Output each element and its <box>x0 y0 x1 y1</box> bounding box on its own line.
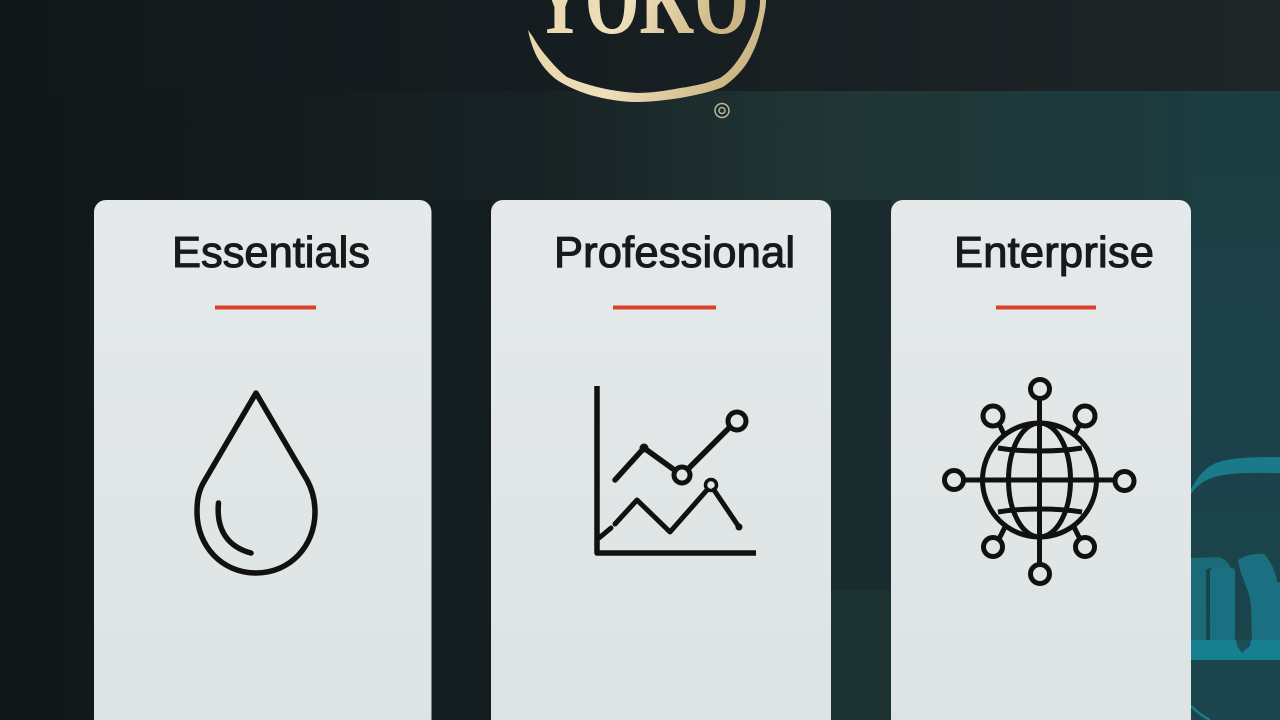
upper line <box>615 427 730 480</box>
heading: Enterprise <box>954 229 1154 277</box>
globe <box>982 423 1096 537</box>
icon: water drop <box>197 393 315 573</box>
book two <box>1210 568 1235 642</box>
shelf notch <box>1236 640 1251 653</box>
shelf arc <box>1191 457 1280 494</box>
red rule <box>613 306 716 310</box>
network nodes <box>1030 380 1050 398</box>
red rule <box>215 306 316 310</box>
connectors <box>999 424 1080 539</box>
lower arc <box>1191 706 1210 720</box>
book one <box>1191 557 1231 640</box>
chart axes <box>597 386 756 553</box>
card <box>491 200 831 720</box>
card <box>94 200 432 720</box>
right shelf illustration <box>1191 457 1280 720</box>
heading: Professional <box>554 229 795 277</box>
red rule <box>996 306 1096 310</box>
registered mark <box>715 104 729 118</box>
shelf <box>1191 640 1280 660</box>
card <box>891 200 1191 720</box>
icon: network globe <box>944 380 1134 584</box>
heading: Essentials <box>172 229 370 277</box>
logo swoosh <box>528 0 766 102</box>
book three <box>1238 554 1280 642</box>
icon: line chart <box>597 386 756 553</box>
logo <box>528 0 766 118</box>
panel: Essentials <box>94 200 432 720</box>
panel: Enterprise <box>891 200 1191 720</box>
panel: Professional <box>491 200 831 720</box>
lower line <box>599 490 739 538</box>
